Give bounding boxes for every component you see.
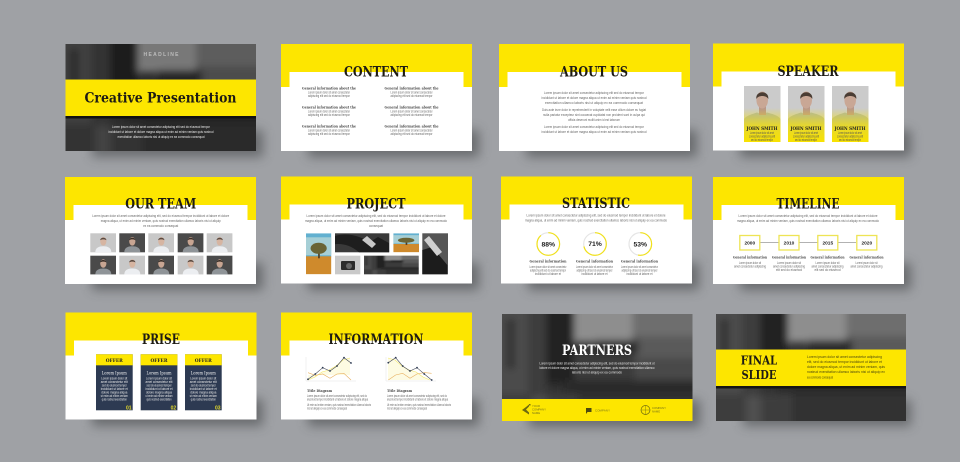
content list: adipiscing elit sed do eiusmod tempor [308, 94, 351, 98]
speaker card 1: sed do eiusmod tempor [751, 138, 774, 142]
content list: General information about the [302, 124, 356, 129]
description [525, 214, 667, 222]
statistic captions [530, 258, 659, 276]
content list: adipiscing elit sed do eiusmod tempor [390, 113, 433, 117]
speaker card 2 [788, 86, 824, 142]
offer card 1: quis nostrud exercitation [102, 398, 127, 402]
donut 88 percent: 88% [541, 242, 555, 248]
offer card 1: sed do eiusmod tempor [102, 384, 127, 388]
description: Lorem ipsum dolor sit amet consectetur adipiscing elit, sed do eiusmod tempor incididunt ut labore et dolore [92, 214, 229, 218]
timeline captions: elit sed do eiusmod [776, 268, 802, 272]
offer card 2: incididunt ut labore et [146, 387, 173, 391]
offer card 2: quis nostrud exercitation [146, 398, 172, 402]
heading: TIMELINE [776, 196, 840, 212]
main title: Creative Presentation [84, 91, 236, 107]
speaker card 3 [832, 86, 868, 142]
statistic captions: Lorem ipsum dolor sit amet consectetur [530, 265, 567, 269]
description: magna aliqua, ut enim ad minim veniam, quis nostrud exercitation ullamco laboris nisi ut aliquip ex ea commodo [737, 219, 879, 223]
timeline captions: General information [850, 255, 884, 260]
speaker card 2: consectetur adipiscing elit [793, 134, 819, 138]
logo: your company name: NAME [532, 411, 540, 415]
description [540, 362, 655, 374]
chart caption left: nisi ut aliquip ex ea commodo consequat [307, 406, 347, 410]
heading: PRISE [142, 332, 180, 348]
offer card 1 [96, 354, 133, 411]
description: laboris nisi ut aliquip ex ea commodo [572, 370, 622, 374]
slide: Speaker [713, 44, 904, 150]
statistic captions: adipiscing elit sed do eiusmod tempor [530, 268, 567, 272]
chart caption left: Lorem ipsum dolor sit amet consectetur adipiscing elit, sed do [307, 394, 367, 398]
chart caption right [387, 388, 451, 410]
offer card 1: 01 [126, 405, 132, 411]
statistic captions: adipiscing elit sed do eiusmod tempor [622, 268, 658, 272]
description: labore et dolore magna aliqua, ut enim ad minim veniam, quis nostrud exercitation ullamco [540, 366, 655, 370]
yellow band [66, 80, 256, 116]
description: Lorem ipsum dolor sit amet consectetur adipiscing elit, sed do eiusmod tempor incididunt ut labore et dolore [738, 214, 878, 218]
slide: Creative Presentation [45, 24, 278, 174]
offer card 3: quis nostrud exercitation [191, 398, 216, 402]
heading [741, 352, 777, 382]
speaker card 1: Lorem ipsum dolor sit amet [750, 131, 774, 135]
description: magna aliqua, ut enim ad minim veniam, quis nostrud exercitation ullamco laboris nisi ut aliquip ex ea commodo [525, 218, 667, 222]
offer card 3: OFFER [195, 358, 213, 364]
timeline connector [760, 242, 856, 244]
statistic captions: General information [576, 258, 613, 264]
offer card 3: ut enim ad minim veniam [190, 394, 217, 398]
body text: incididunt ut labore et dolore magna aliqua ut enim ad minim veniam quis nostrud [542, 96, 647, 100]
description: magna aliqua, ut enim ad minim veniam, quis nostrud exercitation ullamco laboris nisi ut aliquip [101, 219, 221, 223]
logo: company globe: NAME [652, 410, 660, 414]
speaker card 2: sed do eiusmod tempor [795, 138, 818, 142]
logo: company globe [641, 406, 666, 414]
heading: OUR TEAM [125, 197, 196, 213]
slide: Final slide [696, 294, 928, 444]
timeline captions: General information [810, 255, 845, 260]
timeline year boxes: 2020 [861, 240, 872, 246]
offer card 2: OFFER [150, 358, 168, 364]
content list: adipiscing elit sed do eiusmod tempor [390, 132, 433, 136]
body text: ea commodo consequat [807, 376, 833, 380]
description: consequat [369, 224, 383, 228]
slide: Prise [66, 312, 256, 420]
offer card 3: amet consectetur elit [190, 380, 217, 384]
body text [542, 91, 647, 134]
chart caption right: Ut enim ad minim veniam, quis nostrud exercitation ullamco laboris [387, 403, 451, 407]
heading: CONTENT [344, 65, 408, 81]
content list: General information about the [384, 124, 439, 129]
chart caption right: eiusmod tempor incididunt ut labore et dolore magna aliqua [387, 398, 448, 402]
chart caption right: Lorem ipsum dolor sit amet consectetur adipiscing elit, sed do [387, 394, 447, 398]
timeline captions: amet consectetur adipiscing [850, 264, 883, 268]
description: Lorem ipsum dolor sit amet consectetur adipiscing elit, sed do eiusmod tempor incididunt ut labore et dolore [306, 214, 446, 218]
offer card 3: Lorem ipsum dolor sit [190, 376, 216, 380]
chart caption left: Title Diagram [307, 388, 332, 393]
offer card 1: OFFER [106, 358, 124, 364]
timeline year boxes: 2010 [784, 240, 795, 246]
offer card 2: 02 [171, 405, 176, 411]
offer card 2 [141, 354, 177, 411]
logo: your company name [522, 404, 546, 415]
body text: elit, sed do eiusmod tempor incididunt ut labore et [807, 360, 882, 364]
description: Lorem ipsum dolor sit amet consectetur adipiscing elit, sed do eiusmod tempor incididunt ut [540, 362, 655, 366]
chart caption left: eiusmod tempor incididunt ut labore et dolore magna aliqua [307, 398, 368, 402]
description: Lorem ipsum dolor sit amet consectetur adipiscing elit, sed do eiusmod tempor incididunt ut labore et dolore [526, 214, 666, 218]
timeline captions: Lorem ipsum dolor sit [856, 261, 878, 265]
description [305, 214, 447, 228]
offer card 3 [185, 354, 222, 411]
content list: Lorem ipsum dolor sit amet consectetur [390, 129, 433, 133]
heading: FINAL [741, 352, 777, 367]
statistic captions: incididunt ut labore et [626, 272, 653, 276]
body text: dolore magna aliqua, ut enim ad minim veniam, quis [807, 365, 885, 369]
body text: nostrud exercitation ullamco laboris nisi ut aliquip ex [807, 370, 885, 374]
content list [302, 86, 439, 136]
offer card 2: dolore magna aliqua [146, 390, 172, 394]
heading: SPEAKER [778, 64, 839, 80]
content list: General information about the [302, 105, 356, 110]
offer card 3: incididunt ut labore et [190, 387, 217, 391]
offer card 1: incididunt ut labore et [101, 387, 128, 391]
description: magna aliqua, ut enim ad minim veniam, quis nostrud exercitation ullamco laboris nisi ut aliquip ex ea commodo [305, 219, 447, 223]
content list: adipiscing elit sed do eiusmod tempor [308, 132, 351, 136]
statistic captions: incididunt ut labore et [535, 272, 561, 276]
slide: Statistic [501, 176, 692, 284]
slide: Project [281, 176, 472, 284]
logo: your company name: COMPANY [532, 408, 546, 412]
description: ex ea commodo consequat [143, 224, 178, 228]
slide: About us [499, 44, 690, 151]
description [737, 214, 879, 223]
slide: Timeline [713, 177, 904, 284]
timeline captions: General information [733, 255, 767, 260]
speaker card 1: consectetur adipiscing elit [749, 134, 775, 138]
body text: officia deserunt mollit anim id est laborum [568, 118, 620, 122]
content list: General information about the [384, 86, 439, 90]
timeline year boxes: 2000 [744, 240, 755, 246]
offer card 2: amet consectetur elit [146, 380, 173, 384]
donut 71 percent: 71% [588, 241, 602, 248]
content list: adipiscing elit sed do eiusmod tempor [390, 94, 433, 98]
timeline captions: amet consectetur adipiscing [734, 264, 766, 268]
body text [807, 355, 885, 380]
content list: Lorem ipsum dolor sit amet consectetur [308, 90, 351, 94]
slide: Partners [482, 294, 715, 444]
timeline captions: General information [772, 255, 806, 260]
speaker card 3: Lorem ipsum dolor sit amet [838, 131, 862, 135]
slide shadows [92, 130, 911, 427]
content list: Lorem ipsum dolor sit amet consectetur [308, 129, 351, 133]
content list: General information about the [384, 105, 439, 110]
statistic captions: Lorem ipsum dolor sit amet consectetur [576, 265, 614, 269]
offer card 2: ut enim ad minim veniam [146, 394, 173, 398]
heading: PROJECT [346, 196, 406, 212]
team photo grid [90, 233, 232, 274]
timeline captions: amet consectetur adipiscing [773, 264, 805, 268]
yellow band [716, 350, 906, 386]
content list: Lorem ipsum dolor sit amet consectetur [390, 110, 433, 114]
yellow logo bar [502, 399, 692, 421]
body text: incididunt ut labore et dolore magna aliqua ut enim ad minim veniam quis nostrud [542, 130, 647, 134]
heading: SLIDE [742, 367, 776, 382]
project photo collage [306, 233, 448, 278]
timeline captions: elit sed do eiusmod [814, 268, 841, 272]
content list: adipiscing elit sed do eiusmod tempor [308, 113, 351, 117]
statistic captions: adipiscing elit sed do eiusmod tempor [576, 268, 613, 272]
offer card 3: 03 [215, 405, 221, 411]
chart caption left [307, 388, 371, 410]
slide: Content [281, 44, 472, 151]
speaker card 1: JOHN SMITH [746, 126, 778, 132]
speaker card 3: JOHN SMITH [834, 126, 866, 132]
timeline year boxes [740, 236, 877, 250]
slide: Our team [65, 177, 256, 284]
timeline captions: Lorem ipsum dolor sit [777, 261, 801, 265]
logo: your company name: YOUR [532, 404, 540, 408]
body text: Lorem ipsum dolor sit amet consectetur adipiscing [807, 355, 882, 359]
speaker card 3: sed do eiusmod tempor [839, 138, 862, 142]
intro paragraph: incididunt ut labore et dolore magna aliqua ut enim ad minim veniam quis nostrud [108, 130, 214, 134]
logo: company flag: COMPANY [595, 408, 610, 412]
offer card 3: dolore magna aliqua [190, 390, 216, 394]
line chart left [306, 357, 356, 381]
offer card 1: Lorem Ipsum [102, 370, 127, 376]
content list: Lorem ipsum dolor sit amet consectetur [308, 110, 351, 114]
intro paragraph: exercitation ullamco laboris nisi ut aliquip ex ea commodo consequat [118, 135, 205, 139]
line chart right [386, 357, 436, 381]
offer card 3: sed do eiusmod tempor [191, 384, 216, 388]
statistic captions: General information [621, 258, 658, 264]
heading: ABOUT US [559, 65, 628, 81]
offer card 2: sed do eiusmod tempor [146, 384, 172, 388]
timeline year boxes: 2015 [822, 240, 833, 246]
donut 71 percent [584, 233, 606, 255]
offer card 2: Lorem Ipsum [146, 370, 172, 376]
speaker card 2: JOHN SMITH [790, 126, 822, 132]
content list: Lorem ipsum dolor sit amet consectetur [390, 90, 433, 94]
logo: company flag [586, 408, 610, 414]
timeline captions: Lorem ipsum dolor sit [816, 261, 840, 265]
donut 53 percent: 53% [633, 241, 647, 248]
logo: company globe: COMPANY [652, 406, 666, 410]
offer card 2: Lorem ipsum dolor sit [146, 376, 172, 380]
donut 88 percent [537, 233, 560, 255]
donut 53 percent [629, 233, 652, 255]
chart caption right: nisi ut aliquip ex ea commodo consequat [387, 406, 427, 410]
body text: Lorem ipsum dolor sit amet consectetur adipiscing elit sed do eiusmod tempor [544, 125, 645, 129]
chart caption left: Ut enim ad minim veniam, quis nostrud exercitation ullamco laboris [307, 403, 371, 407]
intro paragraph: Lorem ipsum dolor sit amet consectetur adipiscing elit sed do eiusmod tempor [112, 125, 211, 129]
heading: STATISTIC [562, 196, 630, 212]
headline label: HEADLINE [144, 52, 179, 58]
speaker card 2: Lorem ipsum dolor sit amet [794, 131, 818, 135]
speaker card 1 [744, 86, 780, 142]
timeline captions: amet consectetur adipiscing [812, 264, 844, 268]
body text: Lorem ipsum dolor sit amet consectetur adipiscing elit sed do eiusmod tempor [544, 91, 645, 95]
chart caption right: Title Diagram [387, 388, 412, 393]
offer card 1: ut enim ad minim veniam [101, 394, 128, 398]
content list: General information about the [302, 86, 356, 90]
description [92, 214, 229, 228]
body text: Duis aute irure dolor in reprehenderit in voluptate velit esse cillum dolore eu fugiat [542, 108, 646, 112]
speaker card 3: consectetur adipiscing elit [837, 134, 863, 138]
timeline captions: Lorem ipsum dolor sit [739, 261, 761, 265]
timeline captions [733, 255, 884, 272]
slide: Information [281, 312, 472, 420]
offer card 3: Lorem Ipsum [191, 370, 216, 376]
heading: PARTNERS [562, 343, 632, 359]
offer card 1: amet consectetur elit [101, 380, 128, 384]
intro paragraph [108, 125, 214, 139]
statistic captions: Lorem ipsum dolor sit amet consectetur [621, 265, 659, 269]
heading: INFORMATION [328, 332, 424, 348]
offer card 1: dolore magna aliqua [101, 390, 127, 394]
body text: nulla pariatur excepteur sint occaecat cupidatat non proident sunt in culpa qui [543, 113, 645, 117]
statistic captions: incididunt ut labore et [582, 272, 608, 276]
offer card 1: Lorem ipsum dolor sit [101, 376, 127, 380]
body text: exercitation ullamco laboris nisi ut aliquip ex ea commodo consequat [545, 101, 643, 105]
statistic captions: General information [530, 258, 567, 264]
